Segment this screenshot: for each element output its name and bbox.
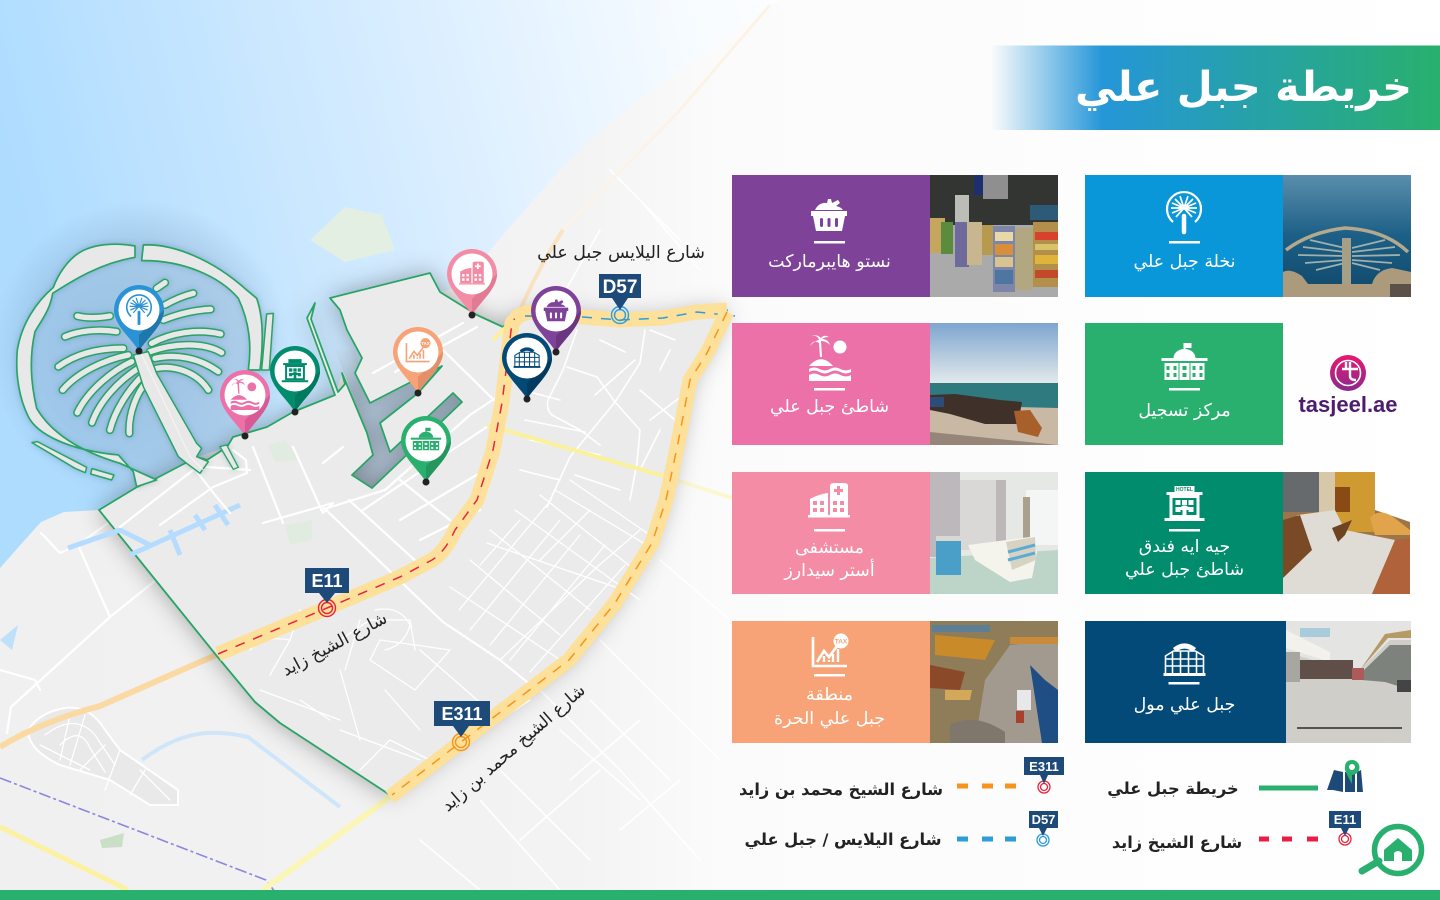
photo: hotel room	[1283, 472, 1410, 594]
card: Jebel Ali Beach	[732, 323, 930, 445]
icon: tax chart: TAX	[835, 638, 848, 646]
road label: E11 name: شارع الشيخ زايد	[279, 608, 391, 681]
card: Jebel Ali Beach: شاطئ جبل علي	[770, 397, 889, 417]
icon: hotel: HOTEL	[1176, 487, 1193, 493]
legend: E311: E311	[1029, 759, 1059, 774]
pin: Free zone	[393, 327, 443, 396]
icon: map with pin	[1327, 760, 1363, 792]
pin: Mall	[502, 333, 552, 402]
road label: E311 name: شارع الشيخ محمد بن زايد	[438, 680, 590, 816]
legend: E11	[1112, 811, 1361, 852]
legend: E311: شارع الشيخ محمد بن زايد	[739, 780, 943, 799]
icon: beach	[809, 335, 851, 381]
logo: house magnifier	[1362, 826, 1422, 874]
card: JA Beach Hotel: جيه ايه فندق	[1139, 537, 1230, 557]
icon: palm	[1167, 192, 1201, 232]
shield D57: D57	[603, 277, 637, 298]
photo: supermarket	[930, 175, 1058, 297]
legend: E11: شارع الشيخ زايد	[1112, 833, 1242, 852]
photo: hospital room	[930, 472, 1058, 594]
shield E11: E11	[311, 571, 343, 591]
pin: Nesto hypermarket	[531, 286, 581, 356]
shield E311: E311	[441, 704, 483, 724]
card: Nesto hypermarket	[732, 175, 930, 297]
icon: mall	[1164, 646, 1206, 674]
canals	[68, 505, 240, 555]
pin: Jebel Ali Beach	[220, 370, 270, 440]
district roads	[120, 323, 690, 770]
legend: E311	[739, 757, 1064, 799]
pin: Hotel	[270, 346, 320, 416]
green patches	[268, 440, 312, 545]
legend: map boundary: خريطة جبل علي	[1107, 779, 1239, 799]
harbour basin	[335, 350, 462, 488]
card: JA Beach Hotel: شاطئ جبل علي	[1125, 560, 1244, 580]
photo: beach	[930, 323, 1058, 445]
icon: tax chart	[813, 634, 848, 666]
card: Tasjeel registration centre	[1085, 323, 1283, 445]
card: Aster Cedars hospital: أستر سيدارز	[783, 559, 875, 581]
road: D57	[515, 310, 735, 320]
road: Sheikh Mohammed bin Zayed E311	[390, 312, 727, 797]
legend: map boundary	[1107, 760, 1363, 799]
icon: hospital	[808, 483, 850, 518]
legend: E11: E11	[1334, 812, 1356, 827]
card: JA Beach Hotel	[1085, 472, 1283, 594]
pin: Hospital	[447, 249, 497, 318]
logo: tasjeel.ae	[1298, 355, 1398, 417]
photo: Palm island aerial	[1283, 175, 1411, 297]
legend: D57	[744, 811, 1058, 850]
card: Aster Cedars hospital: مستشفى	[795, 538, 864, 558]
shield E311	[434, 701, 490, 750]
card: Jebel Ali Mall: جبل علي مول	[1134, 695, 1235, 715]
shield D57	[599, 274, 641, 324]
map background: sea	[0, 0, 800, 640]
card: Tasjeel registration centre: مركز تسجيل	[1138, 401, 1231, 421]
logo: tasjeel.ae: tasjeel.ae	[1298, 392, 1398, 417]
card: Jebel Ali Mall	[1085, 621, 1286, 743]
lagoon shading around palm	[0, 200, 290, 500]
road: Sheikh Zayed E11	[218, 313, 522, 654]
photo: mall interior	[1286, 621, 1411, 743]
footer bar	[0, 890, 1440, 900]
community block	[28, 708, 178, 805]
icon: registration building	[1162, 343, 1208, 380]
card: Jebel Ali Free Zone	[732, 621, 930, 743]
card: Jebel Ali Free Zone: جبل علي الحرة	[774, 709, 885, 729]
legend: D57: D57	[1032, 812, 1055, 827]
card: Nesto hypermarket: نستو هايبرماركت	[768, 252, 891, 272]
title banner	[990, 46, 1440, 130]
card: Jebel Ali Free Zone: منطقة	[806, 685, 853, 705]
legend: D57: شارع اليلايس / جبل علي	[744, 830, 942, 850]
card: Palm Jebel Ali: نخلة جبل علي	[1133, 252, 1236, 272]
palm island	[17, 244, 273, 487]
title banner: خريطة جبل علي	[1075, 62, 1412, 112]
pin: Registration	[401, 416, 451, 486]
card: Aster Cedars hospital	[732, 472, 930, 594]
card: Palm Jebel Ali	[1085, 175, 1283, 297]
icon: basket	[811, 199, 847, 231]
yellow road mid	[487, 425, 667, 477]
shield E11	[305, 568, 349, 616]
outside roads and features	[0, 5, 770, 900]
pin: Palm Jebel Ali	[114, 285, 164, 354]
icon: hotel	[1164, 486, 1204, 521]
photo: free zone yard	[930, 621, 1058, 743]
pin: Free zone: TAX	[421, 341, 430, 346]
road label: D57 name: شارع اليلايس جبل علي	[537, 243, 705, 263]
Jebel Ali map region with green boundary	[99, 273, 727, 795]
